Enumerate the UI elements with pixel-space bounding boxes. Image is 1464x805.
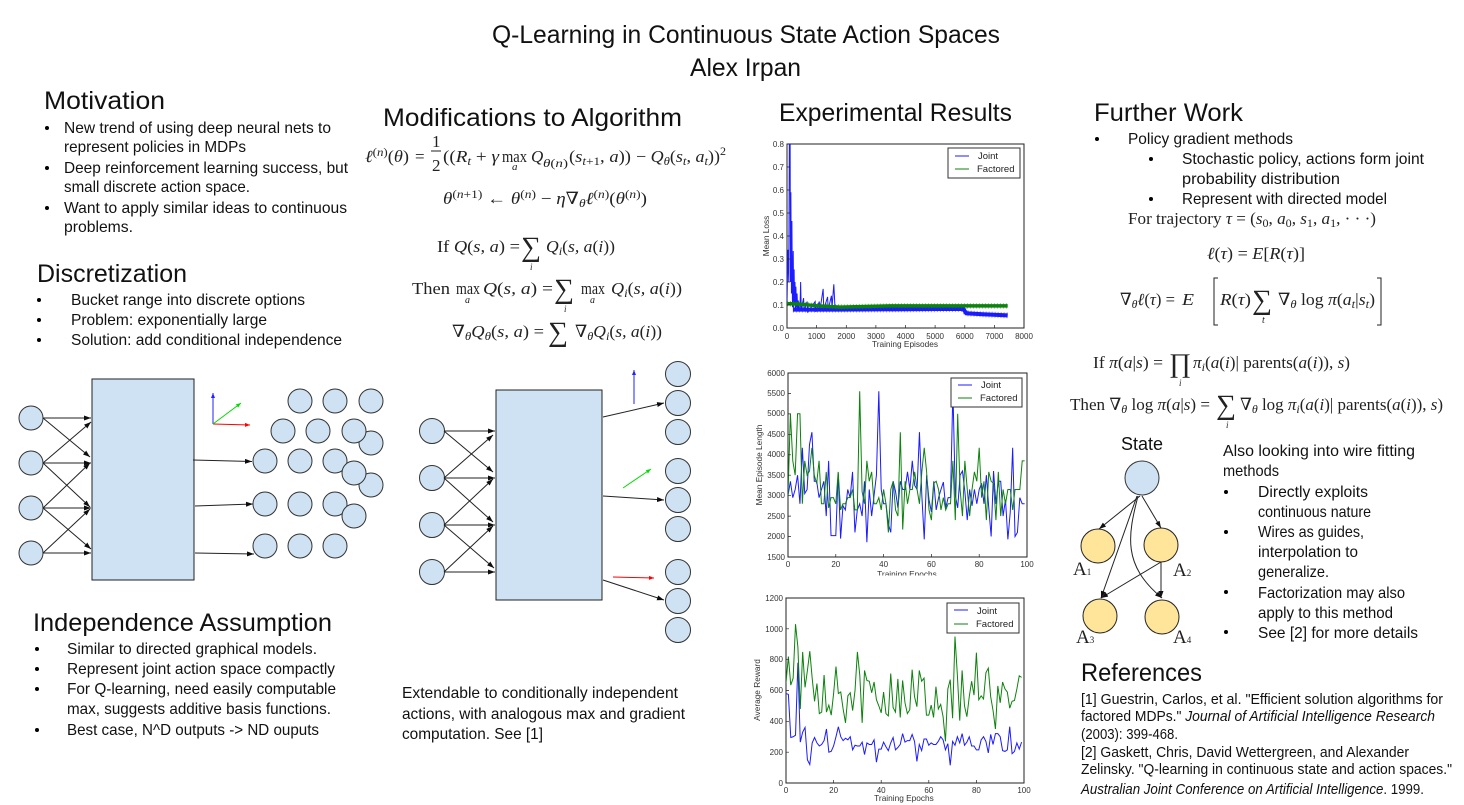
equation: update rule: (n) [594, 187, 609, 201]
equation: policy gradient: t [1352, 297, 1356, 311]
independence bullet list: Represent joint action space compactly [67, 661, 335, 678]
equation: factored gradient: π [1288, 395, 1297, 414]
icon: red axis arrow [613, 577, 654, 578]
equation: loss [365, 132, 726, 175]
equation: factored gradient [1070, 390, 1443, 430]
text block: extendable note: Extendable to conditionally independent [402, 685, 679, 702]
equation: max decomposition: s, a(i)) [634, 279, 681, 298]
equation: loss: − Q [636, 147, 663, 166]
text block: wire fitting: interpolation to [1258, 544, 1358, 561]
reference list: [2] Gaskett, Chris, David Wettergreen, and Alexander [1081, 745, 1409, 761]
x tick labels: 0 [784, 786, 789, 795]
y tick labels [773, 140, 785, 333]
equation: objective: ℓ(τ) = E[R(τ)] [1207, 244, 1305, 263]
equation: loss: , [600, 147, 609, 166]
y tick labels: 2500 [767, 512, 786, 521]
icon: blue axis arrow [633, 370, 635, 404]
y tick labels: 400 [770, 717, 784, 726]
motivation bullet list: Deep reinforcement learning success, but [64, 160, 349, 177]
equation: factored gradient: π(a|s) = [1158, 395, 1210, 414]
equation: loss: (n) [373, 145, 387, 159]
equation: factored gradient: θ [1121, 402, 1127, 416]
equation: update rule: (n) [520, 187, 535, 201]
equation: policy gradient: ) [1369, 290, 1375, 309]
equation: trajectory: , · · ·) [1336, 209, 1376, 228]
equation: factored gradient: Then ∇ [1070, 395, 1121, 414]
equation: loss: + [471, 147, 491, 166]
discretized output nodes [253, 389, 383, 558]
equation: additive Q: s, a(i)) [568, 237, 615, 256]
equation: loss: θ(n) [543, 156, 568, 170]
equation: trajectory: 0 [1263, 216, 1269, 230]
equation: update rule: θ [579, 196, 586, 210]
y tick labels: 6000 [767, 369, 786, 378]
equation: loss: (s [569, 147, 582, 166]
y tick labels: 0.0 [773, 324, 785, 333]
heading: independence assumption: Independence Assumption [33, 609, 332, 637]
equation: max decomposition: ( [628, 279, 634, 298]
motivation bullet list [45, 120, 349, 236]
equation: update rule [443, 187, 647, 210]
discretization bullet list: Solution: add conditional independence [71, 332, 342, 349]
equation: max decomposition: max [581, 279, 605, 298]
y tick labels: 0.2 [773, 278, 785, 287]
y tick labels: 5500 [767, 389, 786, 398]
panel: motivation [44, 87, 349, 236]
x tick labels [786, 560, 1034, 569]
x tick labels: 60 [924, 786, 934, 795]
equation: factored policy: a(i)| parents(a(i)), s) [1211, 353, 1350, 372]
heading: experimental results: Experimental Results [779, 99, 1012, 127]
reference list: Zelinsky. "Q-learning in continuous state and action spaces." [1081, 762, 1452, 778]
independence bullet list [35, 641, 336, 739]
y tick labels: 0.6 [773, 186, 785, 195]
equation: factored policy: ∏ [1169, 348, 1191, 378]
x tick labels: 1000 [808, 332, 826, 341]
equation: policy gradient: ∑ [1252, 285, 1272, 316]
equation: loss: t+1 [582, 154, 599, 168]
state node [1125, 461, 1159, 495]
equation: policy gradient [1120, 278, 1381, 326]
equation: loss: s [676, 147, 683, 166]
text block: extendable note [402, 685, 686, 743]
title: Q-Learning in Continuous State Action Spaces [492, 21, 1000, 49]
input arrows [444, 431, 495, 572]
input nodes [420, 418, 444, 584]
equation: loss: ( [388, 147, 394, 166]
equation: factored gradient: a(i)| parents(a(i)), s) [1305, 395, 1443, 414]
x tick labels: 20 [829, 786, 839, 795]
panel: further work [1070, 99, 1443, 430]
equation: loss: 2 [432, 156, 440, 175]
legend: Factored [976, 619, 1014, 630]
equation: update rule: ℓ [586, 189, 594, 208]
equation: factored gradient: ∑ [1216, 390, 1236, 421]
equation: trajectory: s [1300, 209, 1307, 228]
action nodes [1081, 528, 1179, 634]
x tick labels: 8000 [1015, 332, 1033, 341]
y tick labels: 0.7 [773, 163, 785, 172]
x tick labels: 20 [831, 560, 841, 569]
y tick labels [767, 369, 786, 562]
legend: Joint [981, 380, 1001, 391]
axis labels: Mean Loss [761, 216, 771, 256]
equation: max decomposition: max [456, 279, 480, 298]
equation: additive Q [437, 232, 615, 272]
equation: gradient decomposition: θ [465, 329, 471, 343]
equation: update rule: ) [641, 189, 647, 208]
equation: loss: 1 [432, 132, 440, 151]
equation: trajectory: a [1277, 209, 1286, 228]
action labels: A3 [1076, 627, 1095, 648]
output node groups [666, 362, 690, 642]
equation: additive Q: ∑ [521, 232, 541, 263]
heading: motivation: Motivation [44, 87, 165, 115]
x tick labels: 6000 [956, 332, 974, 341]
equation: loss: a)) [609, 147, 630, 166]
equation: factored gradient: log [1127, 395, 1158, 414]
y tick labels: 1200 [765, 594, 784, 603]
reference list: Australian Joint Conference on Artificial Intelligence. 1999. [1080, 782, 1424, 798]
motivation bullet list: Want to apply similar ideas to continuous [64, 200, 347, 217]
equation: max decomposition: Q(s, a) = [483, 279, 553, 298]
y tick labels: 800 [770, 655, 784, 664]
output arrows [603, 403, 664, 600]
axis labels: Training Epochs [877, 569, 937, 579]
y tick labels: 4500 [767, 430, 786, 439]
panel: modifications to algorithm [365, 104, 726, 348]
equation: gradient decomposition: Q [471, 322, 485, 341]
equation: loss: )) [708, 147, 720, 166]
reference list: (2003): 399-468. [1081, 727, 1178, 743]
equation: max decomposition: a [465, 295, 470, 306]
equation: policy gradient: R(τ) [1219, 290, 1251, 309]
equation: loss: = [415, 147, 425, 166]
legend: Joint [978, 151, 998, 162]
equation: factored policy [1093, 348, 1350, 388]
equation: factored gradient: ( [1300, 395, 1306, 414]
equation: loss: γ [491, 147, 500, 166]
title [492, 21, 1000, 82]
equation: gradient decomposition: i [606, 329, 609, 343]
equation: update rule: θ [443, 189, 452, 208]
equation: max decomposition: ∑ [554, 274, 574, 305]
y tick labels: 1500 [767, 553, 786, 562]
heading: discretization: Discretization [37, 260, 187, 288]
equation: loss: ((R [443, 147, 466, 166]
motivation bullet list: New trend of using deep neural nets to [64, 120, 331, 137]
equation: policy gradient: | [1355, 290, 1359, 309]
equation: gradient decomposition [452, 317, 662, 348]
equation: update rule: (n) [625, 187, 640, 201]
equation: loss: a [512, 161, 518, 173]
x tick labels: 0 [786, 560, 791, 569]
equation: policy gradient: s [1359, 290, 1366, 309]
equation: loss: t [683, 154, 687, 168]
equation: factored gradient: i [1296, 402, 1300, 416]
text block: extendable note: computation. See [1] [402, 726, 543, 743]
axis labels: Mean Episode Length [754, 424, 764, 505]
equation: trajectory: 0 [1286, 216, 1292, 230]
equation: update rule: η∇ [556, 189, 578, 208]
x tick labels [785, 332, 1033, 341]
heading: modifications: Modifications to Algorithm [383, 104, 682, 132]
further work bullet list: probability distribution [1182, 171, 1340, 188]
equation: max decomposition: i [624, 286, 628, 300]
y tick labels: 200 [770, 748, 784, 757]
legend [951, 378, 1022, 407]
equation: policy gradient: ∇ [1278, 290, 1290, 309]
text block: extendable note: actions, with analogous max and gradient [402, 706, 686, 723]
x tick labels: 2000 [837, 332, 856, 341]
equation: trajectory: , [1292, 209, 1300, 228]
x tick labels: 100 [1017, 786, 1031, 795]
state label: State [1121, 434, 1163, 454]
y tick labels: 0.4 [773, 232, 785, 241]
independence bullet list: Best case, N^D outputs -> ND ouputs [67, 722, 319, 739]
panel: independence assumption [33, 609, 336, 739]
text block: wire fitting: apply to this method [1258, 605, 1393, 622]
panel: references [1080, 659, 1452, 798]
title: Alex Irpan [690, 54, 801, 82]
equation: update rule: − [536, 189, 556, 208]
equation: update rule: ← [482, 189, 511, 208]
text block: wire fitting: Factorization may also [1258, 585, 1405, 602]
axis labels: Training Epochs [874, 793, 934, 803]
motivation bullet list: small discrete action space. [64, 179, 250, 196]
x tick labels: 60 [927, 560, 936, 569]
input arrows [43, 418, 91, 553]
equation: factored policy: If π(a|s) = [1093, 353, 1163, 372]
heading: further work: Further Work [1094, 99, 1244, 127]
equation: policy gradient: E [1181, 290, 1195, 309]
reference list: factored MDPs." Journal of Artificial Intelligence Research [1081, 709, 1435, 725]
graph edges [1099, 496, 1162, 598]
axis labels [754, 424, 960, 582]
equation: loss: max [502, 147, 527, 166]
x tick labels: 4000 [897, 332, 915, 341]
equation: additive Q: i [530, 262, 533, 272]
equation: update rule: θ [511, 189, 520, 208]
legend [948, 148, 1020, 178]
equation: max decomposition: a [590, 295, 595, 306]
y tick labels: 0 [779, 779, 784, 788]
diagram: discretized network [19, 379, 383, 580]
equation: loss: ℓ [365, 147, 373, 166]
y tick labels: 2000 [767, 532, 786, 541]
y tick labels: 0.5 [773, 209, 785, 218]
equation: additive Q: Q [546, 237, 559, 256]
further work bullet list: Stochastic policy, actions form joint [1182, 151, 1425, 168]
equation: loss: t [704, 154, 709, 168]
equation: policy gradient: (τ) = [1144, 290, 1175, 309]
x tick labels: 80 [972, 786, 981, 795]
y tick labels [765, 594, 784, 788]
action labels: A1 [1073, 559, 1091, 580]
equation: trajectory: 1 [1330, 216, 1336, 230]
action labels: A4 [1173, 627, 1192, 648]
equation: gradient decomposition: ( [609, 322, 616, 341]
input nodes [19, 406, 43, 565]
equation: policy gradient: t [1262, 315, 1265, 326]
equation: policy gradient: log [1297, 290, 1328, 309]
discretization bullet list: Problem: exponentially large [71, 312, 267, 329]
independence bullet list: Similar to directed graphical models. [67, 641, 317, 658]
equation: loss: 2 [720, 144, 726, 158]
equation: trajectory: a [1322, 209, 1330, 228]
legend: Factored [977, 164, 1014, 175]
equation: trajectory: , [1313, 209, 1322, 228]
x tick labels: 5000 [926, 332, 945, 341]
legend: Factored [980, 393, 1018, 404]
equation: additive Q: i [559, 244, 562, 258]
equation: loss: ( [670, 147, 676, 166]
text block: wire fitting: continuous nature [1258, 504, 1371, 521]
equation: factored policy: i [1202, 360, 1205, 374]
discretization bullet list: Bucket range into discrete options [71, 292, 305, 309]
equation: factored gradient: θ [1252, 402, 1258, 416]
axis labels: Training Episodes [872, 339, 938, 349]
legend [947, 603, 1019, 633]
equation: policy gradient: θ [1132, 297, 1138, 311]
equation: trajectory: For trajectory τ = (s [1128, 209, 1262, 228]
x tick labels [784, 786, 1031, 795]
axis labels: Average Reward [752, 659, 762, 721]
reference list: [1] Guestrin, Carlos, et al. "Efficient solution algorithms for [1081, 692, 1443, 708]
y tick labels: 600 [770, 686, 784, 695]
y tick labels: 3000 [767, 491, 786, 500]
action labels [1073, 559, 1192, 648]
equation: update rule: (n+1) [452, 187, 480, 201]
network box [496, 390, 602, 600]
equation: max decomposition: i [564, 304, 567, 314]
output arrows [193, 460, 254, 554]
text block: wire fitting: Also looking into wire fitting [1223, 443, 1415, 460]
equation: trajectory: , [1269, 209, 1277, 228]
equation: factored policy: ( [1205, 353, 1211, 372]
equation: max decomposition: Q [611, 279, 624, 298]
legend: Joint [977, 606, 997, 617]
equation: gradient decomposition: s, a(i)) [615, 322, 662, 341]
equation: loss: a [695, 147, 704, 166]
equation: additive Q: If Q(s, a) = [437, 237, 520, 256]
independence bullet list: For Q-learning, need easily computable [67, 681, 336, 698]
equation: gradient decomposition: Q [593, 322, 606, 341]
equation: factored gradient: ∇ [1240, 395, 1252, 414]
equation: gradient decomposition: ∇ [452, 322, 464, 341]
diagram: factored network [420, 362, 690, 642]
further work bullet list: Policy gradient methods [1128, 131, 1293, 148]
action labels: A2 [1173, 560, 1191, 581]
y tick labels: 0.8 [773, 140, 785, 149]
heading: references: References [1081, 659, 1202, 687]
equation: factored gradient: log [1258, 395, 1288, 414]
chart: mean episode length [754, 369, 1034, 582]
text block: wire fitting: Wires as guides, [1258, 524, 1364, 541]
motivation bullet list: represent policies in MDPs [64, 139, 246, 156]
y tick labels: 0.3 [773, 255, 785, 264]
further work bullet list: Represent with directed model [1182, 191, 1387, 208]
network box [92, 379, 194, 580]
y tick labels: 3500 [767, 471, 786, 480]
text block: wire fitting [1223, 443, 1418, 642]
equation: policy gradient: ℓ [1137, 290, 1144, 309]
y tick labels: 1000 [765, 625, 784, 634]
equation: trajectory: 1 [1307, 216, 1313, 230]
panel: discretization [37, 260, 342, 349]
equation: loss: θ [664, 154, 670, 168]
equation: policy gradient: ∇ [1120, 290, 1132, 309]
equation: trajectory [1128, 209, 1376, 230]
x tick labels: 7000 [986, 332, 1004, 341]
icon: green axis arrow [623, 469, 651, 488]
equation: factored policy: i [1179, 378, 1182, 388]
x tick labels: 80 [975, 560, 984, 569]
reference list [1080, 692, 1452, 798]
equation: loss: θ) [394, 147, 409, 166]
chart: mean loss [761, 132, 1033, 349]
equation: policy gradient: θ [1290, 297, 1297, 311]
equation: gradient decomposition: ( [491, 322, 498, 341]
x tick labels: 0 [785, 332, 790, 341]
axis labels [752, 659, 934, 803]
equation: policy gradient: t [1366, 297, 1370, 311]
y tick labels: 5000 [767, 409, 786, 418]
axis labels [761, 216, 938, 349]
equation: gradient decomposition: ∑ [548, 317, 568, 348]
equation: gradient decomposition: s, a) = [497, 322, 542, 341]
equation: update rule: θ [616, 189, 625, 208]
independence bullet list: max, suggests additive basis functions. [67, 701, 331, 718]
equation: factored gradient: i [1226, 420, 1229, 430]
x tick labels: 40 [877, 786, 886, 795]
x tick labels: 40 [879, 560, 889, 569]
chart: average reward [752, 594, 1031, 803]
equation: loss: t [467, 154, 472, 168]
text block: wire fitting: See [2] for more details [1258, 625, 1418, 642]
discretization bullet list [37, 292, 342, 349]
text block: wire fitting: generalize. [1258, 564, 1329, 581]
x tick labels: 100 [1020, 560, 1034, 569]
equation: factored policy: π [1193, 353, 1202, 372]
equation: loss: , [686, 147, 695, 166]
x tick labels: 3000 [867, 332, 885, 341]
motivation bullet list: problems. [64, 219, 133, 236]
diagram: directed graphical model [1073, 434, 1192, 648]
equation: gradient decomposition: θ [587, 329, 593, 343]
further work bullet list [1095, 131, 1425, 208]
y tick labels: 4000 [767, 450, 786, 459]
y tick labels: 0.1 [773, 301, 785, 310]
equation: additive Q: ( [562, 237, 568, 256]
equation: loss: Q [531, 147, 543, 166]
equation: update rule: ( [609, 189, 616, 208]
text block: wire fitting: methods [1223, 463, 1279, 480]
icon: xyz axes [213, 393, 250, 425]
equation: policy gradient: π(a [1328, 290, 1351, 309]
equation: max decomposition: Then [412, 279, 451, 298]
equation: gradient decomposition: θ [485, 329, 491, 343]
equation: max decomposition [412, 274, 682, 314]
text block: wire fitting: Directly exploits [1258, 484, 1368, 501]
equation: gradient decomposition: ∇ [575, 322, 587, 341]
